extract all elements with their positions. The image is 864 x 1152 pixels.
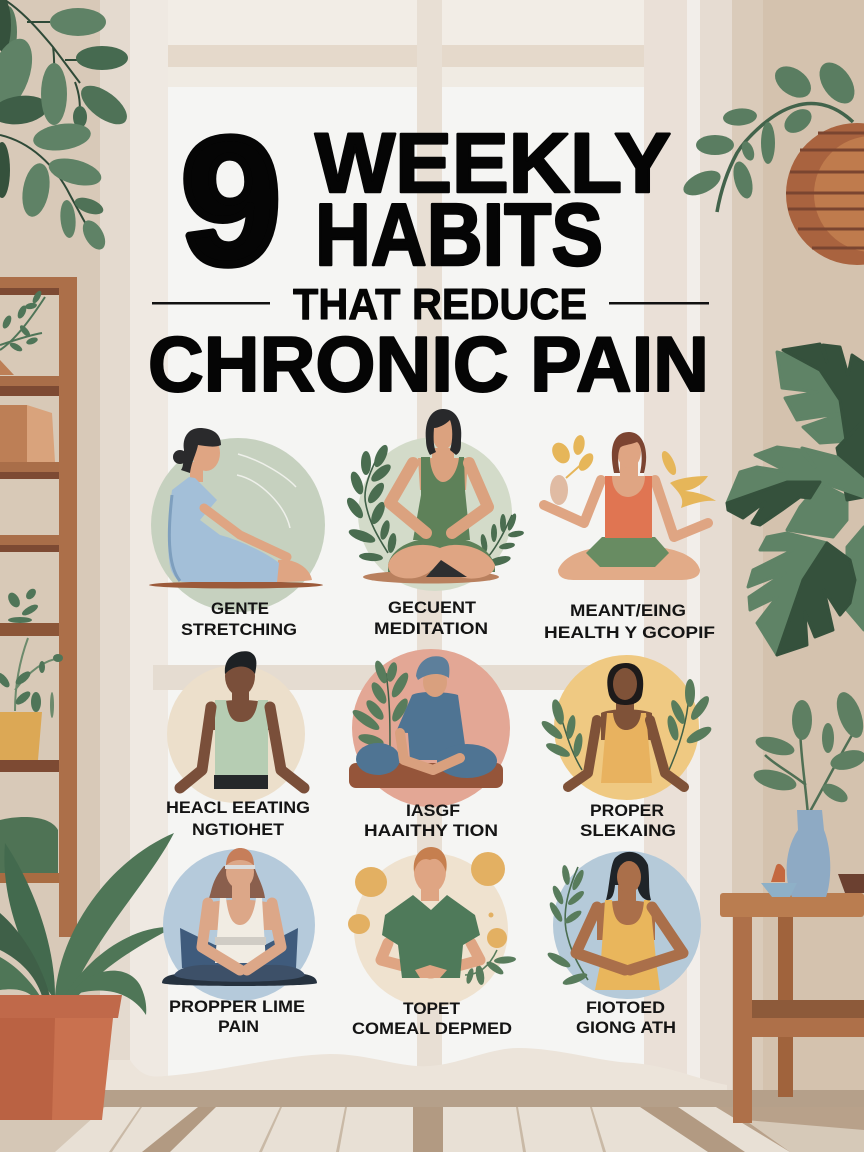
label: habit 1 bbox=[181, 599, 297, 639]
label: habit 4: HEACL EEATING bbox=[166, 798, 310, 817]
title bbox=[148, 101, 709, 408]
bush on lower shelf bbox=[0, 817, 58, 873]
panel: habit 9 bbox=[546, 851, 701, 999]
label: habit 6: PROPER bbox=[590, 801, 664, 820]
potted plant on shelf bbox=[0, 638, 63, 760]
label: habit 6 bbox=[580, 801, 676, 840]
panel: habit 8 bbox=[348, 847, 516, 1007]
plant: top-left vine bbox=[0, 0, 133, 253]
label: habit 8: TOPET bbox=[403, 999, 461, 1018]
title: WEEKLY bbox=[315, 116, 671, 210]
label: habit 6: SLEKAING bbox=[580, 821, 676, 840]
box on shelf bbox=[0, 405, 55, 462]
label: habit 1: GENTE bbox=[211, 599, 269, 618]
label: habit 5: HAAITHY TION bbox=[364, 821, 498, 840]
label: habit 5 bbox=[364, 801, 498, 840]
label: habit 3: HEALTH Y GCOPIF bbox=[544, 623, 715, 642]
plant and hanging basket: top-right bbox=[680, 56, 864, 265]
window and curtains bbox=[100, 0, 763, 1091]
panel: habit 3 bbox=[544, 432, 716, 580]
sprig on top shelf bbox=[0, 289, 45, 375]
shelf unit left bbox=[0, 277, 77, 937]
title: 9 bbox=[181, 101, 281, 302]
floor plant in terracotta pot bbox=[0, 833, 174, 1120]
label: habit 7 bbox=[169, 997, 305, 1036]
panel: habit 5 bbox=[349, 649, 510, 807]
title: CHRONIC PAIN bbox=[148, 320, 709, 408]
plant above vase bbox=[751, 689, 864, 815]
label: habit 3: MEANT/EING bbox=[570, 601, 686, 620]
panel: habit 1 bbox=[149, 428, 325, 612]
panel: habit 2 bbox=[344, 409, 524, 591]
label: habit 7: PROPPER LIME bbox=[169, 997, 305, 1016]
label: habit 4: NGTIOHET bbox=[192, 820, 285, 839]
panel: habit 7 bbox=[162, 848, 317, 1001]
plant: monstera right bbox=[727, 344, 864, 655]
label: habit 9: GIONG ATH bbox=[576, 1018, 676, 1037]
label: habit 4 bbox=[166, 798, 310, 839]
label: habit 3 bbox=[544, 601, 715, 642]
side table with vase bbox=[720, 689, 864, 1123]
small plant on shelf bbox=[6, 587, 40, 623]
panel: habit 6 bbox=[539, 655, 714, 800]
label: habit 5: IASGF bbox=[406, 801, 460, 820]
label: habit 8 bbox=[352, 999, 512, 1038]
label: habit 9 bbox=[576, 998, 676, 1037]
label: habit 1: STRETCHING bbox=[181, 620, 297, 639]
label: habit 7: PAIN bbox=[218, 1017, 259, 1036]
label: habit 2 bbox=[374, 598, 488, 638]
label: habit 2: GECUENT bbox=[388, 598, 477, 617]
panel: habit 4 bbox=[167, 651, 305, 803]
label: habit 9: FIOTOED bbox=[586, 998, 665, 1017]
label: habit 2: MEDITATION bbox=[374, 619, 488, 638]
title: HABITS bbox=[315, 185, 603, 284]
floor bbox=[0, 1090, 864, 1152]
title: THAT REDUCE bbox=[293, 280, 587, 329]
label: habit 8: COMEAL DEPMED bbox=[352, 1019, 512, 1038]
